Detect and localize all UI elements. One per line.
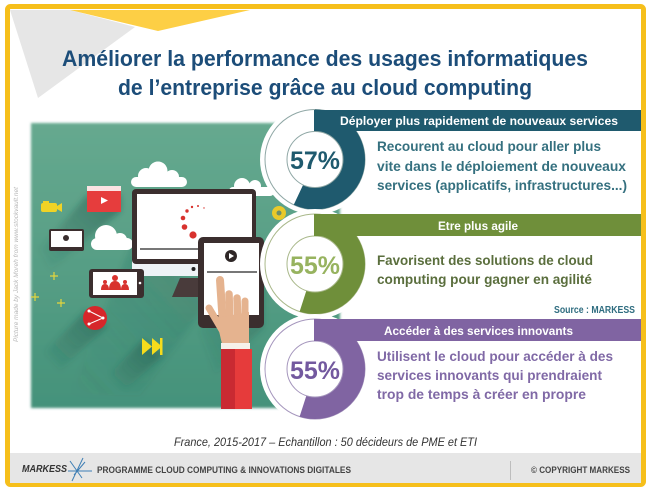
icon: gear [272, 206, 286, 220]
icon: share [83, 306, 107, 330]
long shadows [40, 195, 264, 395]
photo credit: Picture made by Jack Moreh from www.stockvault.net [13, 186, 20, 342]
title: de l’entreprise grâce au cloud computing [118, 75, 532, 100]
logo: Markess: MARKESS [22, 463, 67, 475]
icon: clouds [91, 162, 274, 250]
icon: plus signs [31, 272, 65, 307]
body text: vite dans le déploiement de nouveaux [377, 158, 626, 174]
icon: phone with people [89, 269, 144, 298]
title: Améliorer la performance des usages informatiques [62, 46, 588, 71]
icon: tablet with video [198, 237, 264, 328]
icon: fast-forward [142, 338, 162, 355]
donut: 55% purple: 55% [290, 357, 340, 385]
logo: Markess [22, 458, 92, 481]
body text: services innovants qui prendraient [377, 367, 602, 383]
source: Source : MARKESS [554, 305, 635, 316]
icon: hand and red sleeve [209, 280, 252, 409]
body text: computing pour gagner en agilité [377, 271, 592, 287]
sample caption: France, 2015-2017 – Echantillon : 50 décideurs de PME et ETI [174, 435, 478, 449]
donut: 55% purple [260, 314, 370, 424]
body text: trop de temps à créer en propre [377, 386, 586, 402]
footer bar [10, 453, 641, 483]
body text [377, 138, 627, 193]
body text: Favorisent des solutions de cloud [377, 252, 593, 268]
banner heading: Etre plus agile [438, 219, 518, 233]
body text [377, 252, 593, 287]
banner heading [314, 110, 641, 131]
banner heading [314, 319, 641, 341]
icon: small tablet [49, 229, 84, 251]
icon: red video card [87, 186, 121, 212]
panel: agile [260, 209, 641, 319]
decorative corner triangles [10, 10, 250, 98]
programme label: PROGRAMME CLOUD COMPUTING & INNOVATIONS DIGITALES [97, 465, 351, 476]
illustration: cloud devices [31, 123, 340, 409]
banner heading: Déployer plus rapidement de nouveaux services [340, 114, 618, 128]
donut: 55% green: 55% [290, 252, 340, 280]
body text: Recourent au cloud pour aller plus [377, 138, 601, 154]
donut: 57%: 57% [290, 147, 340, 175]
body text [377, 348, 613, 402]
panel: deployer [260, 104, 641, 214]
copyright: © COPYRIGHT MARKESS [531, 465, 630, 476]
icon: monitor with loading spinner [132, 189, 256, 297]
title [62, 46, 588, 100]
body text: services (applicatifs, infrastructures...) [377, 177, 627, 193]
donut: 57% [260, 104, 370, 214]
banner heading: Accéder à des services innovants [384, 324, 573, 338]
panel: innovation [260, 314, 641, 424]
donut: 55% green [260, 209, 370, 319]
icon: video camera [41, 201, 62, 212]
banner heading [314, 214, 641, 236]
body text: Utilisent le cloud pour accéder à des [377, 348, 613, 364]
